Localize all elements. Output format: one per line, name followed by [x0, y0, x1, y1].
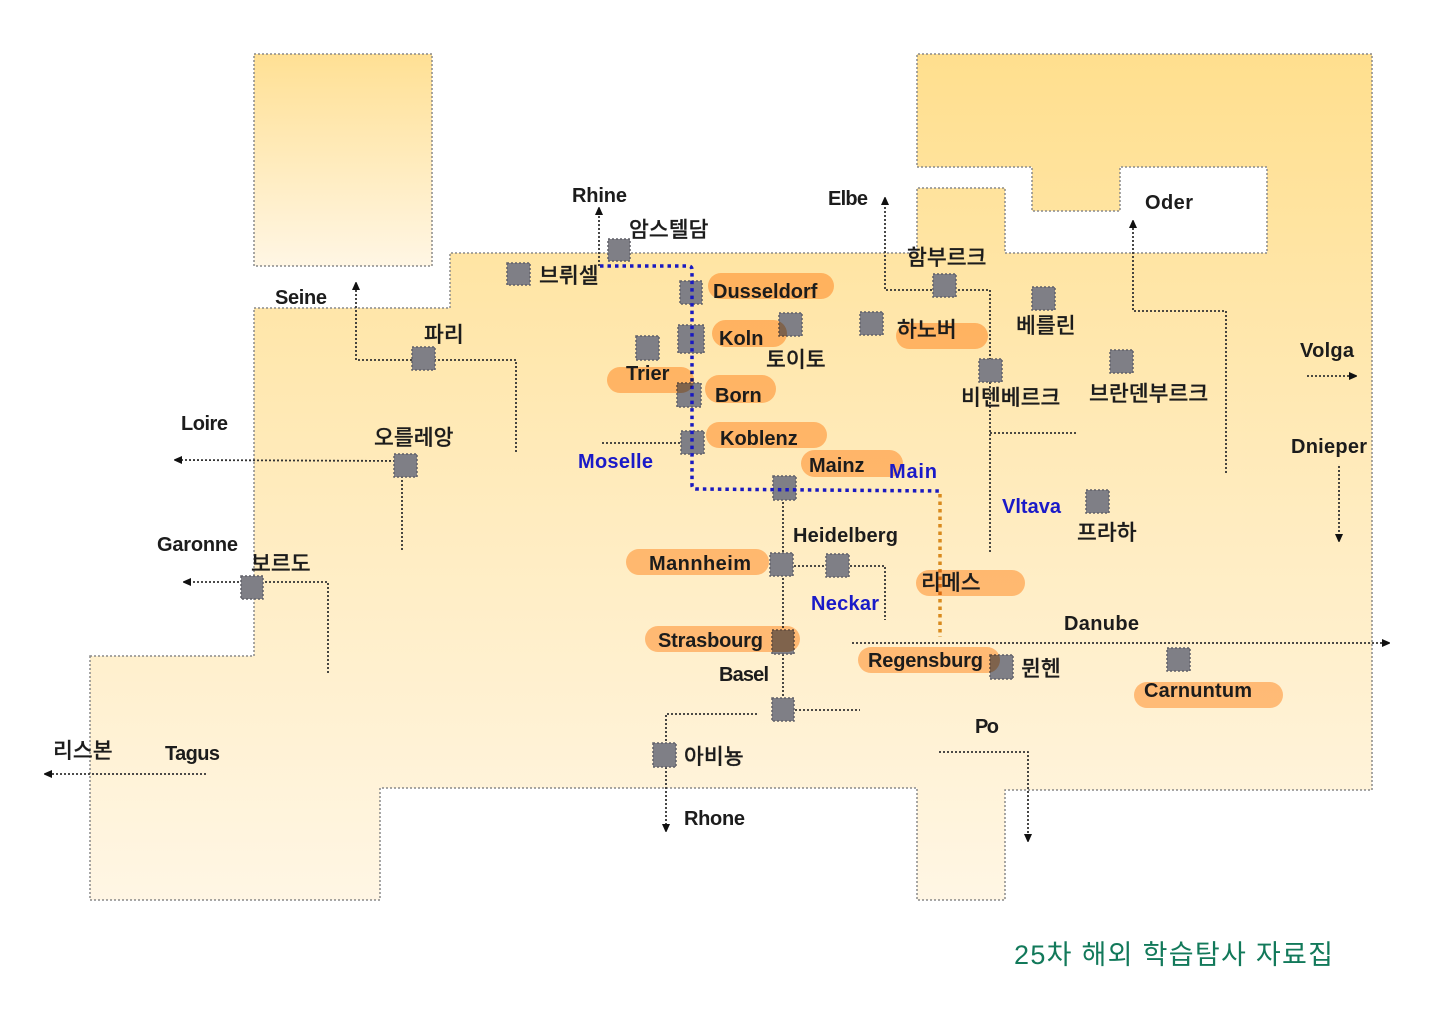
land mass: British Isles block — [254, 54, 432, 266]
river labels: Danube — [1064, 613, 1139, 635]
river: Neckar — [790, 566, 885, 620]
river: Dnieper — [1338, 466, 1340, 535]
city markers — [241, 239, 1190, 767]
city labels: Latin: Carnuntum — [1144, 680, 1252, 702]
river labels: Dnieper — [1291, 436, 1367, 458]
city labels: Latin: Dusseldorf — [713, 281, 818, 303]
city labels: Korean: 베를린 — [1016, 313, 1076, 338]
river labels: Oder — [1145, 192, 1193, 214]
Limes route highlight: orange dotted — [938, 494, 942, 637]
river labels: Loire — [181, 413, 228, 435]
river: Moselle — [602, 442, 692, 444]
river labels: Main — [889, 461, 937, 483]
river: Danube — [852, 642, 1383, 644]
city labels: Latin: Mainz — [809, 455, 865, 477]
city labels: Latin: Trier — [626, 363, 670, 385]
river: Vltava branch — [990, 432, 1076, 434]
river: Po — [939, 752, 1028, 835]
city labels: Latin: Heidelberg — [793, 525, 898, 547]
river: Garonne — [190, 582, 328, 673]
river labels: Vltava — [1002, 496, 1062, 518]
river labels: Volga — [1300, 340, 1355, 362]
river: Loire — [181, 460, 402, 550]
river labels: Garonne — [157, 534, 238, 556]
city labels: Latin: Strasbourg — [658, 630, 763, 652]
city labels: Korean: 리메스 — [921, 570, 981, 595]
Rhine route highlight: blue dotted — [600, 266, 939, 491]
river lines — [51, 204, 1383, 835]
river labels: Po — [975, 716, 999, 738]
river: Rhine lower — [783, 490, 860, 710]
footer caption: 25차 해외 학습탐사 자료집 — [1014, 940, 1333, 970]
city labels: Korean: 뮌헨 — [1021, 656, 1061, 681]
river labels: Elbe — [828, 188, 868, 210]
city labels: Korean: 토이토 — [766, 347, 826, 372]
city labels: Latin: Regensburg — [868, 650, 983, 672]
river labels: Neckar — [811, 593, 879, 615]
city labels: Korean: 아비뇽 — [684, 744, 744, 769]
land mass: main map area — [90, 54, 1372, 900]
river labels — [157, 185, 1367, 830]
city labels: Latin: Koblenz — [720, 428, 798, 450]
highlight pills for Roman cities — [607, 273, 1283, 708]
city labels: Korean: 리스본 — [53, 738, 113, 763]
river: Volga — [1307, 375, 1350, 377]
city labels: Korean: 파리 — [424, 322, 464, 347]
city labels: Latin — [626, 281, 1252, 702]
city labels: Korean: 브뤼셀 — [539, 263, 599, 288]
river labels: Tagus — [165, 743, 220, 765]
city labels: Korean: 함부르크 — [907, 245, 986, 270]
river: Rhine upper — [598, 214, 600, 266]
river: Tagus — [51, 773, 206, 775]
river labels: Seine — [275, 287, 327, 309]
city labels: Korean: 오를레앙 — [374, 425, 454, 450]
city labels: Korean: 암스텔담 — [629, 217, 709, 242]
river labels: Moselle — [578, 451, 653, 473]
river labels: Rhine — [572, 185, 627, 207]
city labels: Korean: 비텐베르크 — [961, 385, 1060, 410]
river: Seine — [356, 289, 516, 452]
river: Oder — [1133, 227, 1226, 473]
city labels: Korean: 하노버 — [897, 317, 957, 342]
city labels: Korean — [53, 217, 1208, 769]
city labels: Korean: 프라하 — [1077, 520, 1137, 545]
river: Elbe — [885, 204, 990, 552]
city labels: Latin: Born — [715, 385, 762, 407]
city labels: Latin: Basel — [719, 664, 769, 686]
river: Rhone — [666, 714, 757, 825]
city labels: Korean: 브란덴부르크 — [1089, 381, 1208, 406]
river labels: Rhone — [684, 808, 745, 830]
city labels: Latin: Mannheim — [649, 553, 751, 575]
city labels: Korean: 보르도 — [251, 551, 311, 576]
city labels: Latin: Koln — [719, 328, 763, 350]
